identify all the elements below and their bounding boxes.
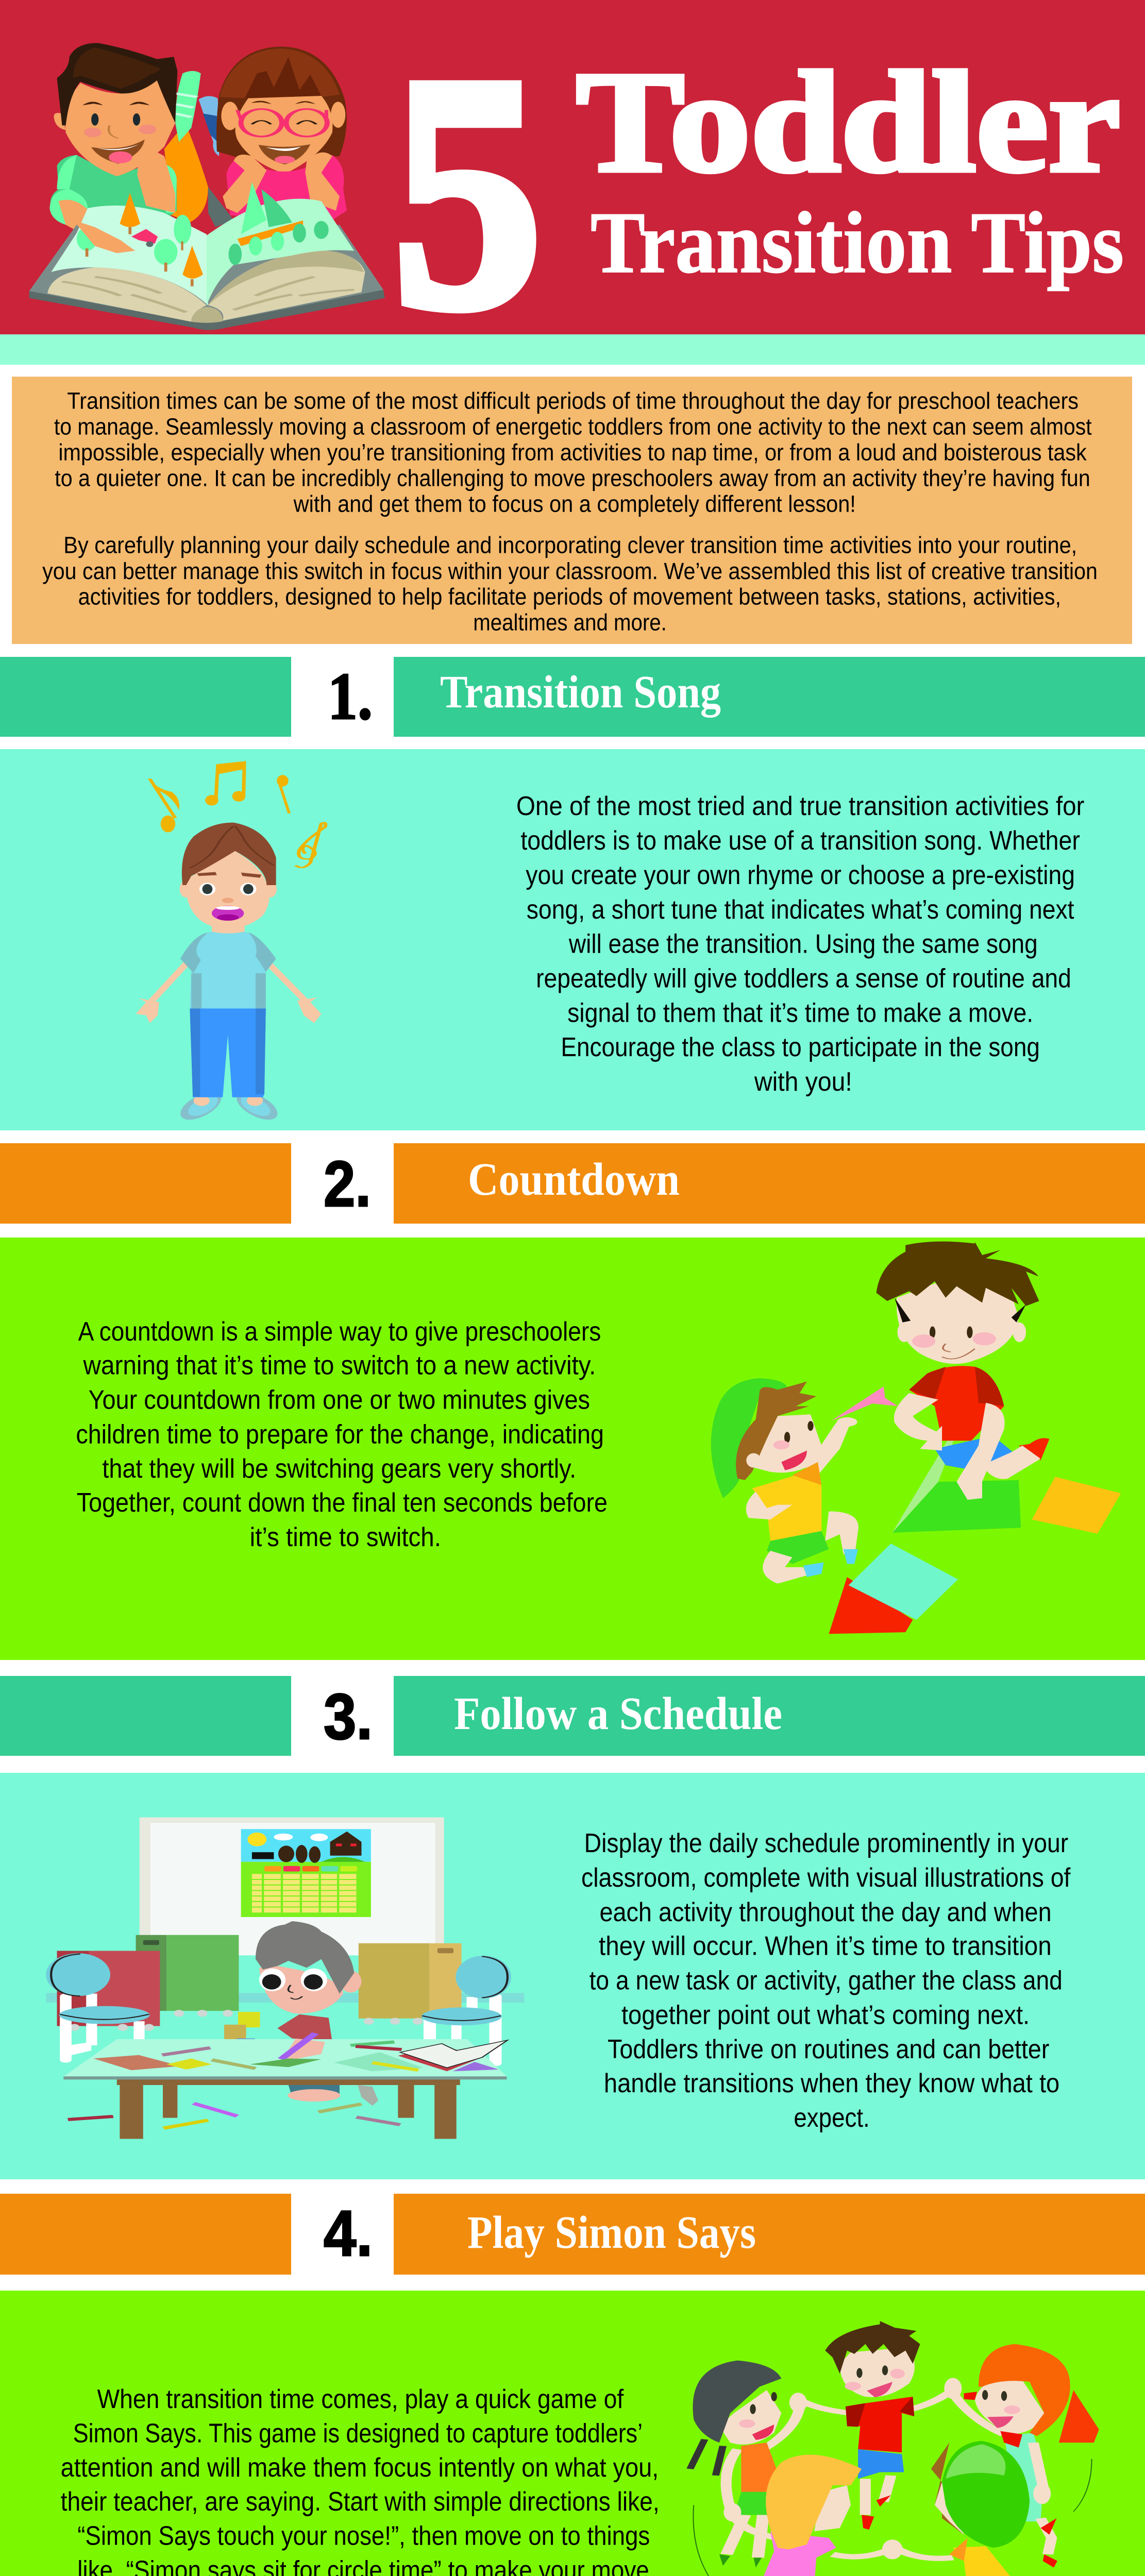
heading: 2. Countdown: Countdown — [468, 1154, 680, 1205]
heading: 4. Play Simon Says: Play Simon Says — [467, 2207, 756, 2258]
dark-hair girl — [726, 2406, 800, 2509]
plane — [831, 1386, 898, 1421]
book — [29, 290, 385, 330]
title: 5: 5 — [393, 8, 542, 377]
text block: tip 3 — [581, 1828, 1071, 2133]
chairs — [60, 1994, 72, 2063]
lockers — [136, 1935, 166, 2011]
text block: tip 1 — [516, 791, 1084, 1097]
kites — [1032, 1477, 1121, 1534]
text block: tip 2 — [76, 1316, 608, 1552]
icon: singing boy with music notes — [136, 761, 326, 1122]
icon: boy drawing at a classroom table with schedule on the wall — [46, 1817, 524, 2139]
heading: 3. Follow a Schedule — [0, 1676, 1145, 1756]
icon: two children reading a pop-up book — [29, 43, 385, 330]
text block: tip 1: with you! — [754, 1067, 852, 1097]
panel: tip 3 schedule — [0, 1773, 1145, 2179]
heading: 2. Countdown — [0, 1143, 1145, 1224]
heading: 3. Follow a Schedule: 3. — [324, 1681, 373, 1753]
heading: 3. Follow a Schedule: Follow a Schedule — [454, 1688, 782, 1739]
text block: tip 2: it’s time to switch. — [250, 1522, 441, 1552]
panel: tip 2 countdown — [0, 1238, 1145, 1660]
panel: tip 1 transition song — [0, 749, 1145, 1130]
heading: 1. Transition Song: Transition Song — [440, 667, 721, 718]
boy — [50, 155, 177, 217]
small kid — [711, 1378, 787, 1498]
heading: 1. Transition Song: 1. — [328, 659, 373, 734]
girl — [216, 46, 347, 159]
table — [63, 2039, 507, 2076]
text block: tip 3: expect. — [794, 2103, 870, 2133]
schedule poster — [241, 1829, 371, 1917]
panel: tip 4 Simon Says — [0, 2291, 1145, 2576]
icon: five children playing in a ring — [690, 2321, 1099, 2576]
title: Toddler: Toddler — [576, 42, 1120, 202]
panel: introduction — [12, 377, 1132, 644]
boy — [277, 2014, 332, 2042]
header banner — [0, 0, 1145, 377]
blocks — [238, 2012, 260, 2027]
heading: 4. Play Simon Says: 4. — [324, 2198, 373, 2269]
heading: 1. Transition Song — [0, 657, 1145, 737]
text block: tip 4 — [61, 2384, 660, 2576]
big boy — [1019, 1438, 1049, 1461]
red-hair girl — [1059, 2390, 1099, 2443]
text block: introduction: mealtimes and more. — [473, 609, 667, 635]
heading: 2. Countdown: 2. — [324, 1148, 371, 1220]
icon: children with paper plane and kites — [711, 1242, 1121, 1634]
centre boy — [865, 2476, 891, 2515]
heading: 4. Play Simon Says — [0, 2194, 1145, 2275]
text block: introduction — [42, 388, 1098, 635]
